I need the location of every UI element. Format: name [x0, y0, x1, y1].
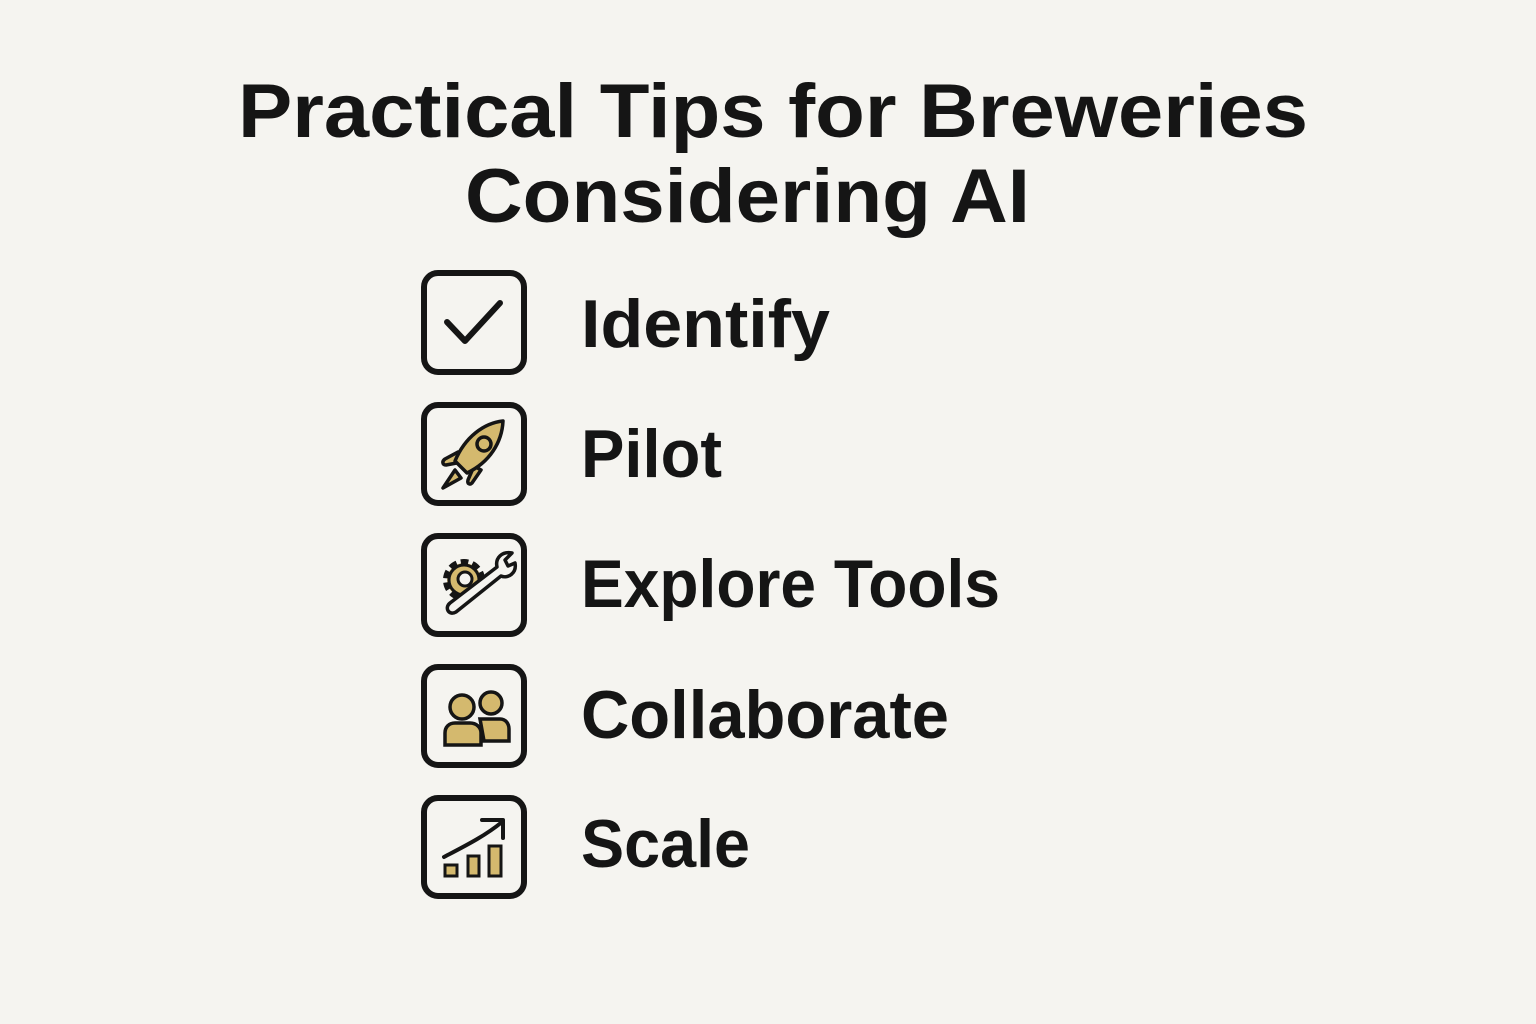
- title: Practical Tips for Breweries: [238, 69, 1308, 154]
- item: Pilot: [424, 405, 722, 503]
- label: Collaborate: Collaborate: [581, 677, 949, 753]
- label: Explore Tools: Explore Tools: [581, 546, 1000, 622]
- label: Scale: Scale: [581, 806, 750, 882]
- title: Considering AI: [465, 154, 1030, 239]
- label: Pilot: Pilot: [581, 416, 722, 492]
- item: Identify: [424, 273, 830, 372]
- title: [238, 69, 1308, 239]
- icon: checkmark: [424, 273, 524, 372]
- icon: gear and wrench: [424, 536, 524, 634]
- label: Identify: Identify: [581, 286, 830, 362]
- item: Explore Tools: [424, 536, 1000, 634]
- item: Collaborate: [424, 667, 949, 765]
- icon: people: [424, 667, 524, 765]
- icon: growth chart: [424, 798, 524, 896]
- item: Scale: [424, 798, 750, 896]
- icon: rocket: [424, 405, 524, 503]
